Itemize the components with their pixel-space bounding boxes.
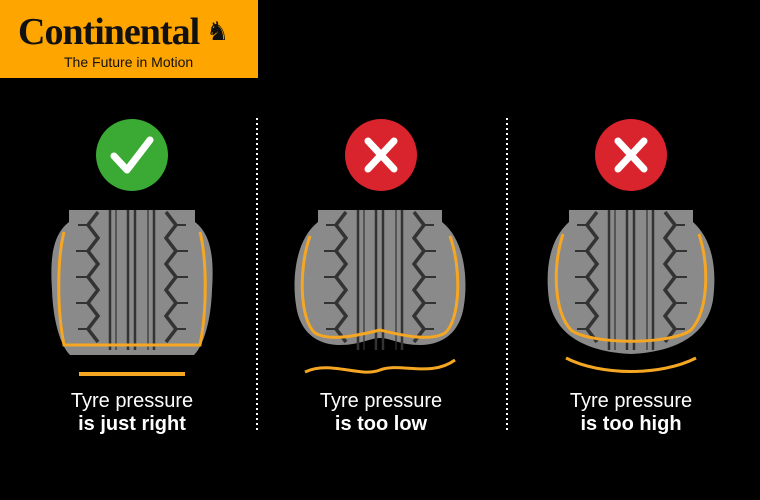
icon: check xyxy=(96,119,168,191)
divider xyxy=(506,118,508,430)
caption: too low: is too low xyxy=(335,413,427,435)
caption: just right xyxy=(71,390,193,435)
icon: cross low xyxy=(345,119,417,191)
caption: too high: Tyre pressure xyxy=(570,390,692,412)
caption: too high: is too high xyxy=(580,413,682,435)
caption: just right: is just right xyxy=(78,413,186,435)
caption: too low: Tyre pressure xyxy=(320,390,442,412)
tyre: too high xyxy=(548,210,714,372)
divider xyxy=(256,118,258,430)
caption: just right: Tyre pressure xyxy=(71,390,193,412)
logo: Continental xyxy=(18,11,199,53)
caption: too low xyxy=(320,390,442,435)
tyre: too low xyxy=(295,210,465,372)
icon: cross high xyxy=(595,119,667,191)
tyre: just right xyxy=(51,210,213,374)
icon: horse: ♞ xyxy=(206,16,229,46)
logo xyxy=(0,0,258,78)
caption: too high xyxy=(570,390,692,435)
logo: The Future in Motion xyxy=(64,54,193,70)
